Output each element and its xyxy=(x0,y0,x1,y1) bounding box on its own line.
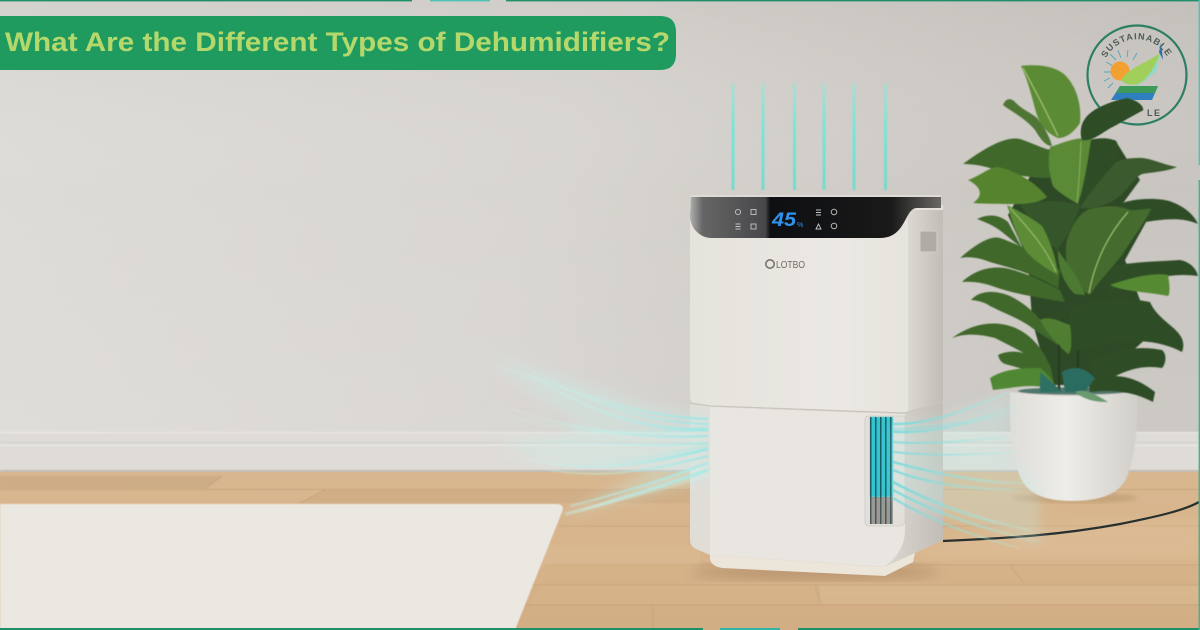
logo sun rays xyxy=(1104,50,1137,88)
vertical vapour lines xyxy=(732,83,887,190)
leaf: top large xyxy=(1021,65,1080,138)
logo leaf xyxy=(1121,53,1160,85)
leaf: centre big fiddle xyxy=(1066,206,1151,295)
rug xyxy=(0,504,563,630)
logo sun xyxy=(1110,62,1130,80)
leaf group: back leaves xyxy=(1070,98,1198,402)
leaf: lower centre xyxy=(1040,318,1071,354)
seam xyxy=(690,402,943,413)
wooden floor xyxy=(0,472,1200,630)
vent recess xyxy=(865,416,905,526)
upper body xyxy=(690,205,943,413)
title: What Are the Different Types of Dehumidifiers? xyxy=(5,27,670,57)
leaf: right light xyxy=(1110,274,1170,296)
control band xyxy=(690,197,941,238)
dehumidifier xyxy=(690,195,943,576)
leaf: lower centre dark xyxy=(1020,201,1080,250)
handle recess xyxy=(920,231,937,252)
plant overlap on logo xyxy=(1081,98,1143,140)
plant xyxy=(952,65,1198,402)
logo text: SUSTAINABLE xyxy=(1102,33,1172,57)
device floor shadow xyxy=(690,564,940,580)
wall background xyxy=(0,0,1200,472)
airflow left xyxy=(480,352,708,516)
leaf: bottom teal-tinted xyxy=(990,368,1058,390)
base xyxy=(710,553,915,576)
panel icons xyxy=(735,209,837,229)
logo: LE xyxy=(1147,108,1162,118)
leaf: centre left light xyxy=(1007,205,1058,275)
title banner xyxy=(0,16,676,70)
stems xyxy=(1059,345,1078,392)
logo solar panel xyxy=(1111,86,1158,100)
logo xyxy=(1086,24,1188,126)
vent slats xyxy=(870,417,892,524)
display reading: 45 xyxy=(771,210,796,231)
dehumidifier: % xyxy=(797,222,803,229)
brand mark xyxy=(766,260,774,268)
power cord xyxy=(943,502,1199,541)
leaf: centre large xyxy=(1049,138,1091,204)
lower body xyxy=(710,402,943,567)
skirting board xyxy=(0,432,1200,473)
brand name: LOTBO xyxy=(776,259,805,271)
plant pot xyxy=(1010,388,1137,503)
top lid xyxy=(691,195,941,208)
lower body side xyxy=(884,402,943,567)
rear lower left panel xyxy=(690,404,710,555)
vent glow xyxy=(870,417,893,497)
dark foliage mass xyxy=(1008,140,1150,385)
airflow right xyxy=(893,392,1040,548)
leaf group: left leaves xyxy=(952,139,1065,382)
upper body side xyxy=(908,210,943,413)
